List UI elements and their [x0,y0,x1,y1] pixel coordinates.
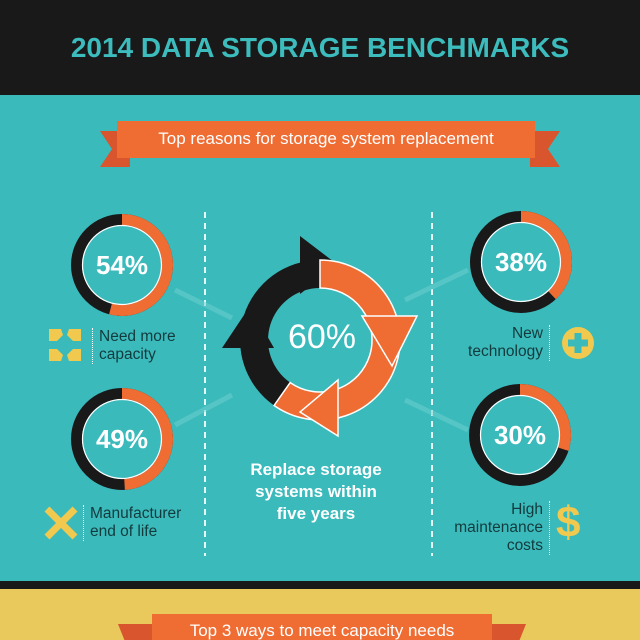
donut 54% [71,214,173,316]
header [0,0,640,95]
text: replace storage: five years [277,504,355,523]
text: replace storage [250,460,382,523]
donut 54%: 54% [96,250,148,280]
banner: top reasons [100,121,560,167]
label: need more capacity: Need more [99,328,176,345]
bottom section [0,581,640,640]
label: need more capacity: capacity [99,346,156,363]
label: manufacturer end of life: Manufacturer [90,505,181,522]
icon: x [44,506,78,540]
label: new technology [430,325,550,361]
banner: top 3 ways: Top 3 ways to meet capacity needs [190,621,454,640]
label: new technology: New [512,325,543,342]
label: manufacturer end of life: end of life [90,523,157,540]
label: high maintenance costs [430,501,550,555]
label: high maintenance costs: maintenance [454,519,543,536]
icon: arrows [49,329,81,361]
donut 38%: 38% [495,247,547,277]
text: replace storage: Replace storage [250,460,382,479]
cycle arrow chart [222,236,418,438]
title: 2014 DATA STORAGE BENCHMARKS [71,32,569,63]
label: high maintenance costs: High [511,501,543,518]
label: need more capacity [92,328,176,364]
icon: plus [562,327,594,359]
icon: dollar: $ [556,498,580,547]
cycle arrow chart: 60% [288,318,356,356]
donut 49%: 49% [96,424,148,454]
donut 38% [470,211,572,313]
text: replace storage: systems within [255,482,377,501]
label: manufacturer end of life [83,505,181,541]
donut 30% [469,384,571,486]
banner: top reasons: Top reasons for storage system replacement [158,129,494,148]
banner: top 3 ways [118,614,526,640]
label: new technology: technology [468,343,543,360]
donut 30%: 30% [494,420,546,450]
label: high maintenance costs: costs [507,537,543,554]
donut 49% [71,388,173,490]
